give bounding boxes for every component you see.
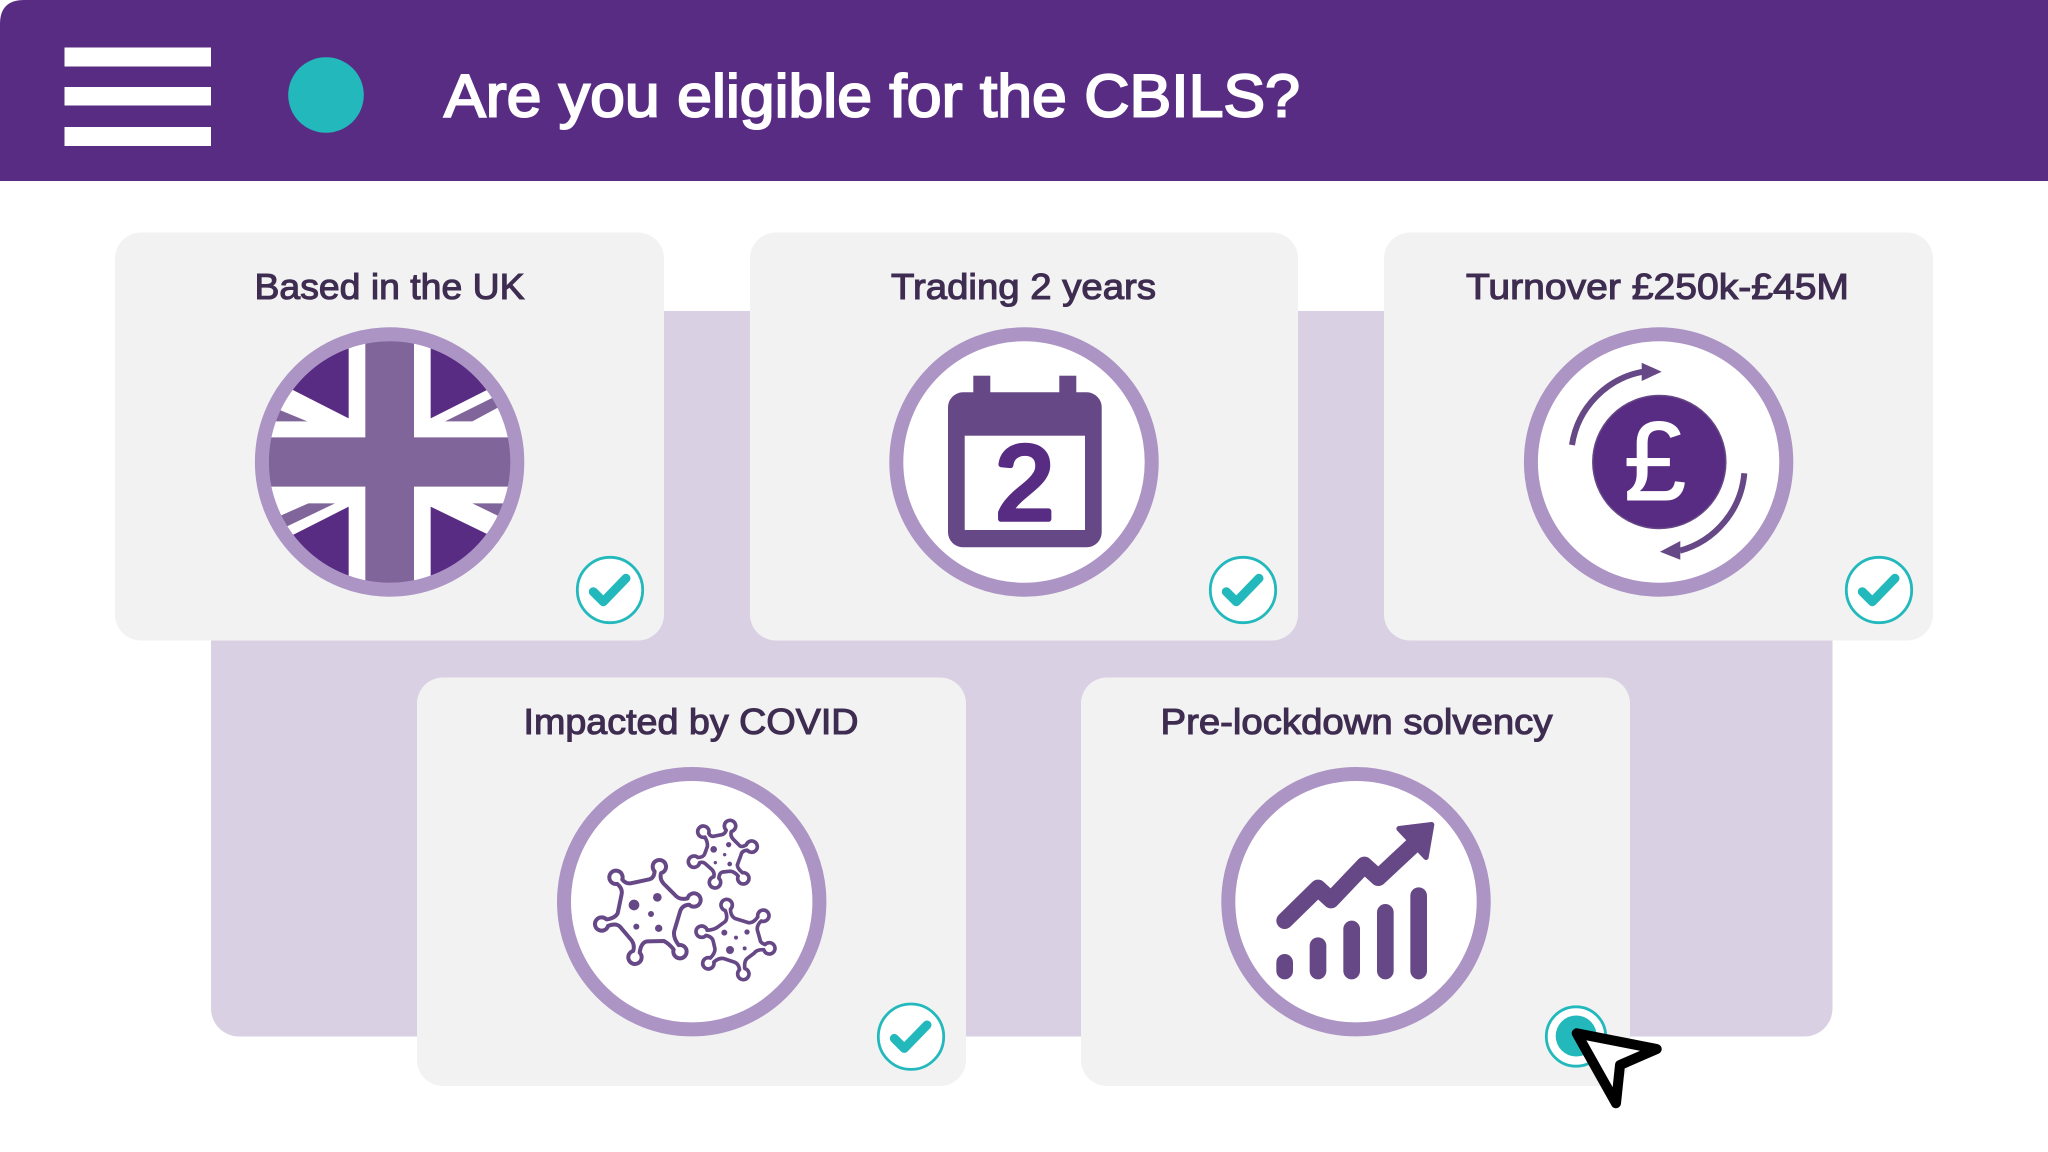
- heading: turnover: Turnover £250k-£45M: [1466, 266, 1849, 307]
- check badge: [1846, 557, 1912, 623]
- panel: turnover: [1384, 232, 1933, 640]
- title: Are you eligible for the CBILS?: [444, 62, 1300, 130]
- background band: [211, 311, 1832, 1036]
- icon: teal dot: [288, 57, 364, 133]
- panel: impacted by COVID: [417, 678, 966, 1086]
- panel: trading 2 years: [750, 232, 1298, 640]
- icon: calendar: 2: [995, 425, 1054, 542]
- check badge: [878, 1004, 944, 1069]
- icon: pound cycle: £: [1624, 399, 1686, 524]
- icon: union flag: [262, 333, 517, 590]
- icon: hamburger menu: [64, 48, 211, 146]
- panel: based in the UK: [115, 232, 664, 640]
- icon: mouse cursor: [1577, 1033, 1657, 1103]
- arrow: lower clockwise: [1660, 473, 1744, 560]
- arrow: upper clockwise: [1572, 363, 1662, 445]
- check badge: [1210, 557, 1276, 623]
- heading: pre-lockdown solvency: Pre-lockdown solvency: [1160, 701, 1552, 742]
- header bar: [0, 0, 2048, 181]
- check badge: [577, 557, 643, 623]
- heading: trading 2 years: Trading 2 years: [891, 266, 1156, 307]
- heading: impacted by COVID: Impacted by COVID: [524, 701, 858, 742]
- icon: calendar: [896, 334, 1152, 590]
- icon: growth chart: [1228, 774, 1484, 1029]
- icon: virus particles: [564, 774, 819, 1029]
- icon: pound cycle: [1531, 334, 1786, 590]
- selected radio badge: [1546, 1007, 1606, 1066]
- heading: based in the UK: Based in the UK: [254, 266, 524, 307]
- panel: pre-lockdown solvency: [1081, 678, 1630, 1086]
